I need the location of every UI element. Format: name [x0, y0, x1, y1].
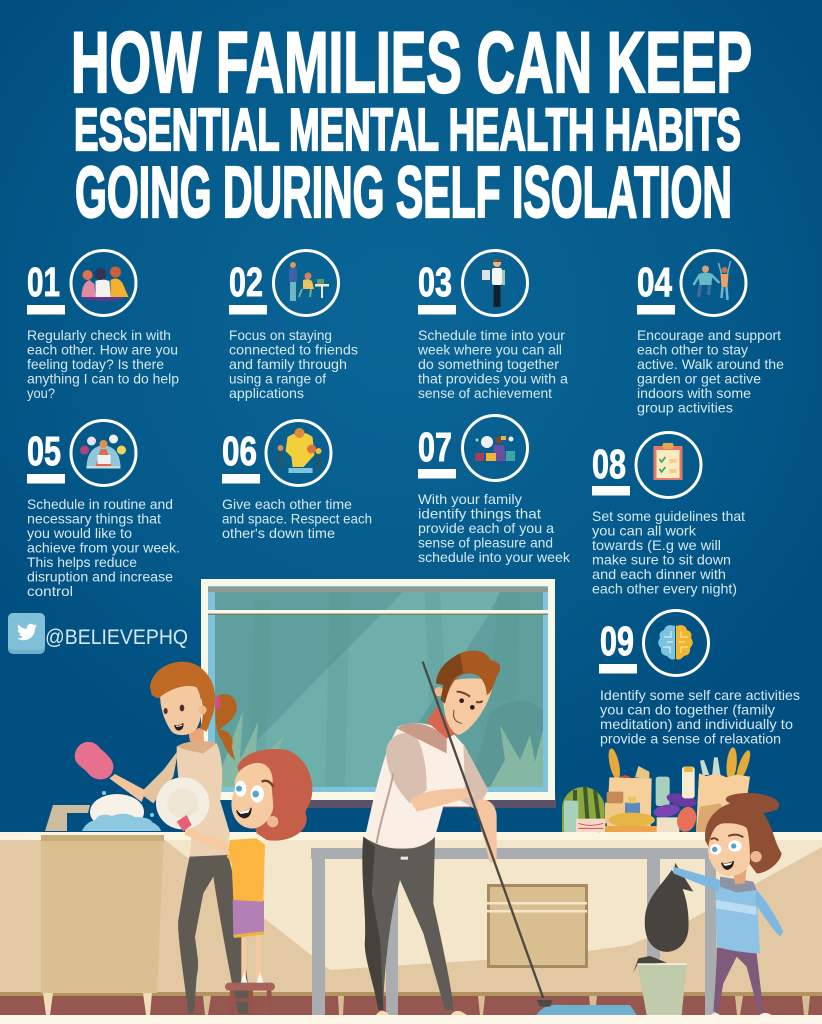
- step 02: using a range of: [229, 372, 326, 386]
- fringe: [705, 808, 752, 847]
- sponge: [75, 742, 113, 779]
- step 01: [27, 250, 179, 401]
- step 03: that provides you with a: [418, 372, 568, 386]
- arm on broom: [477, 799, 497, 863]
- step 04: each other to stay: [637, 342, 748, 358]
- icon: three people talking: [82, 266, 128, 301]
- face details: [459, 698, 464, 703]
- step 01: feeling today? Is there: [27, 357, 164, 372]
- step 06: and space. Respect each: [222, 512, 372, 526]
- legs: [241, 935, 246, 980]
- neck: [427, 707, 457, 738]
- bottle middle: [656, 777, 670, 806]
- bin: [637, 964, 687, 1015]
- hair: [150, 662, 215, 732]
- step 08: make sure to sit down: [592, 552, 731, 568]
- step 06: 06: [222, 428, 257, 474]
- step 05: [27, 420, 180, 599]
- step 03: do something together: [418, 357, 559, 372]
- step 05: disruption and increase: [27, 570, 173, 584]
- paper bag right: [696, 773, 750, 832]
- drawer: [488, 886, 586, 966]
- groceries: [562, 747, 753, 834]
- ponytail: [215, 694, 237, 760]
- step 08: towards (E.g we will: [592, 538, 721, 553]
- step 06: Give each other time: [222, 497, 352, 512]
- step 09: provide a sense of relaxation: [600, 732, 781, 746]
- step 01: Regularly check in with: [27, 328, 171, 343]
- face: [708, 815, 750, 876]
- step 01: each other. How are you: [27, 342, 178, 358]
- mop head: [537, 1005, 637, 1015]
- step 04: group activities: [637, 400, 733, 416]
- sweater: [715, 880, 760, 953]
- face: [443, 678, 493, 735]
- twitter handle: @BELIEVEPHQ: [45, 626, 188, 649]
- step 05: This helps reduce: [27, 555, 137, 570]
- step 05: achieve from your week.: [27, 540, 180, 556]
- step 04: indoors with some: [637, 386, 751, 401]
- icon: man holding paper: [482, 259, 505, 307]
- step 07: [418, 416, 570, 565]
- icon: brain: [658, 625, 693, 660]
- step 08: Set some guidelines that: [592, 509, 745, 524]
- step 09: [599, 610, 800, 746]
- face details: [235, 781, 246, 797]
- pantry items: [605, 803, 625, 823]
- character: girl: [156, 749, 312, 1015]
- step 03: [417, 250, 568, 401]
- step 09: Identify some self care activities: [600, 688, 800, 703]
- plate: [156, 777, 209, 829]
- step 02: and family through: [229, 357, 347, 372]
- window glass light reflection: [215, 592, 500, 787]
- step 08: 08: [592, 441, 626, 487]
- step 07: With your family: [418, 492, 522, 507]
- step 01: anything I can to do help: [27, 372, 179, 386]
- hair: [705, 793, 782, 873]
- step 02: connected to friends: [229, 342, 358, 358]
- step 05: 05: [27, 428, 61, 474]
- broom handle: [423, 662, 543, 998]
- step 04: 04: [637, 259, 672, 305]
- paper bag left: [607, 777, 652, 830]
- icon: twitter bird: [17, 624, 37, 640]
- character: father with broom: [362, 651, 637, 1015]
- collar: [397, 723, 447, 753]
- step 08: [592, 432, 745, 596]
- step 04: Encourage and support: [637, 328, 781, 343]
- step 02: 02: [229, 259, 263, 305]
- step 04: [637, 250, 784, 416]
- milk bottle: [682, 767, 695, 798]
- face details: [164, 708, 168, 714]
- step 03: Schedule time into your: [418, 328, 565, 343]
- food tray: [608, 813, 655, 827]
- step 07: 07: [418, 424, 452, 470]
- step 03: 03: [418, 259, 452, 305]
- step 02: applications: [229, 386, 304, 401]
- step 04: active. Walk around the: [637, 357, 784, 372]
- table: [311, 840, 716, 1015]
- meat package: [576, 819, 605, 832]
- stool: [229, 990, 273, 1015]
- shirt: [227, 838, 265, 902]
- shirt: [365, 723, 473, 848]
- bottles in bag: [700, 757, 721, 776]
- step 01: you?: [27, 386, 55, 401]
- baguette: [606, 747, 622, 781]
- head: [231, 763, 273, 829]
- pants: [178, 853, 252, 1015]
- room wall and floor: [0, 832, 822, 1024]
- plant fronds: [215, 710, 543, 787]
- step 05: Schedule in routine and: [27, 497, 173, 512]
- arm forward: [410, 788, 475, 812]
- step 07: provide each of you a: [418, 521, 554, 536]
- step 09: meditation) and individually to: [600, 717, 793, 732]
- neck: [188, 727, 204, 742]
- step 07: sense of pleasure and: [418, 536, 553, 550]
- step 06: other's down time: [222, 526, 335, 541]
- hair: [237, 749, 312, 841]
- icon: yellow head with gears: [278, 428, 322, 473]
- skirt: [233, 900, 264, 937]
- pants: [362, 837, 453, 1010]
- icon: man with hobbies: [475, 436, 515, 461]
- step 02: Focus on staying: [229, 328, 332, 343]
- step 05: you would like to: [27, 526, 132, 541]
- sleeves: [386, 733, 427, 803]
- step 07: identify things that: [418, 506, 541, 522]
- shoes: [376, 1011, 467, 1015]
- baguettes in bag: [725, 747, 738, 781]
- icon: two people jumping: [694, 261, 730, 300]
- character: mother: [75, 662, 252, 1015]
- trash bag: [645, 870, 689, 952]
- icon: clipboard checklist: [654, 443, 682, 480]
- bottle left: [564, 801, 578, 832]
- dishes and foam: [90, 794, 144, 830]
- title: [71, 15, 752, 233]
- character: boy with trash bag: [633, 793, 783, 1015]
- blouse: [177, 741, 230, 857]
- faucet: [45, 805, 90, 831]
- window: [201, 579, 556, 808]
- eggplants: [665, 791, 698, 809]
- step 07: schedule into your week: [418, 550, 570, 565]
- step 09: you can do together (family: [600, 702, 775, 718]
- step 08: each other every night): [592, 582, 737, 596]
- step 08: and each dinner with: [592, 567, 726, 582]
- arm: [185, 827, 230, 855]
- step 01: 01: [27, 259, 60, 305]
- step 08: you can all work: [592, 524, 696, 538]
- step 06: [222, 420, 372, 541]
- step 02: [229, 250, 358, 401]
- icon: people with devices at table: [289, 262, 329, 301]
- head: [160, 682, 202, 735]
- step 05: control: [27, 584, 73, 599]
- step 04: garden or get active: [637, 372, 761, 386]
- step 03: sense of achievement: [418, 386, 552, 401]
- step 03: week where you can all: [417, 342, 562, 358]
- pants: [713, 947, 763, 1012]
- step 09: 09: [600, 618, 634, 664]
- watermelon: [562, 787, 605, 832]
- salmon: [674, 805, 699, 834]
- arm: [140, 750, 178, 803]
- sink cabinet: [41, 791, 164, 1015]
- icon: person at laptop with bubbles: [80, 434, 126, 468]
- hair: [436, 651, 500, 703]
- face details: [710, 844, 721, 855]
- twitter handle: [8, 613, 188, 654]
- step 05: necessary things that: [27, 512, 161, 526]
